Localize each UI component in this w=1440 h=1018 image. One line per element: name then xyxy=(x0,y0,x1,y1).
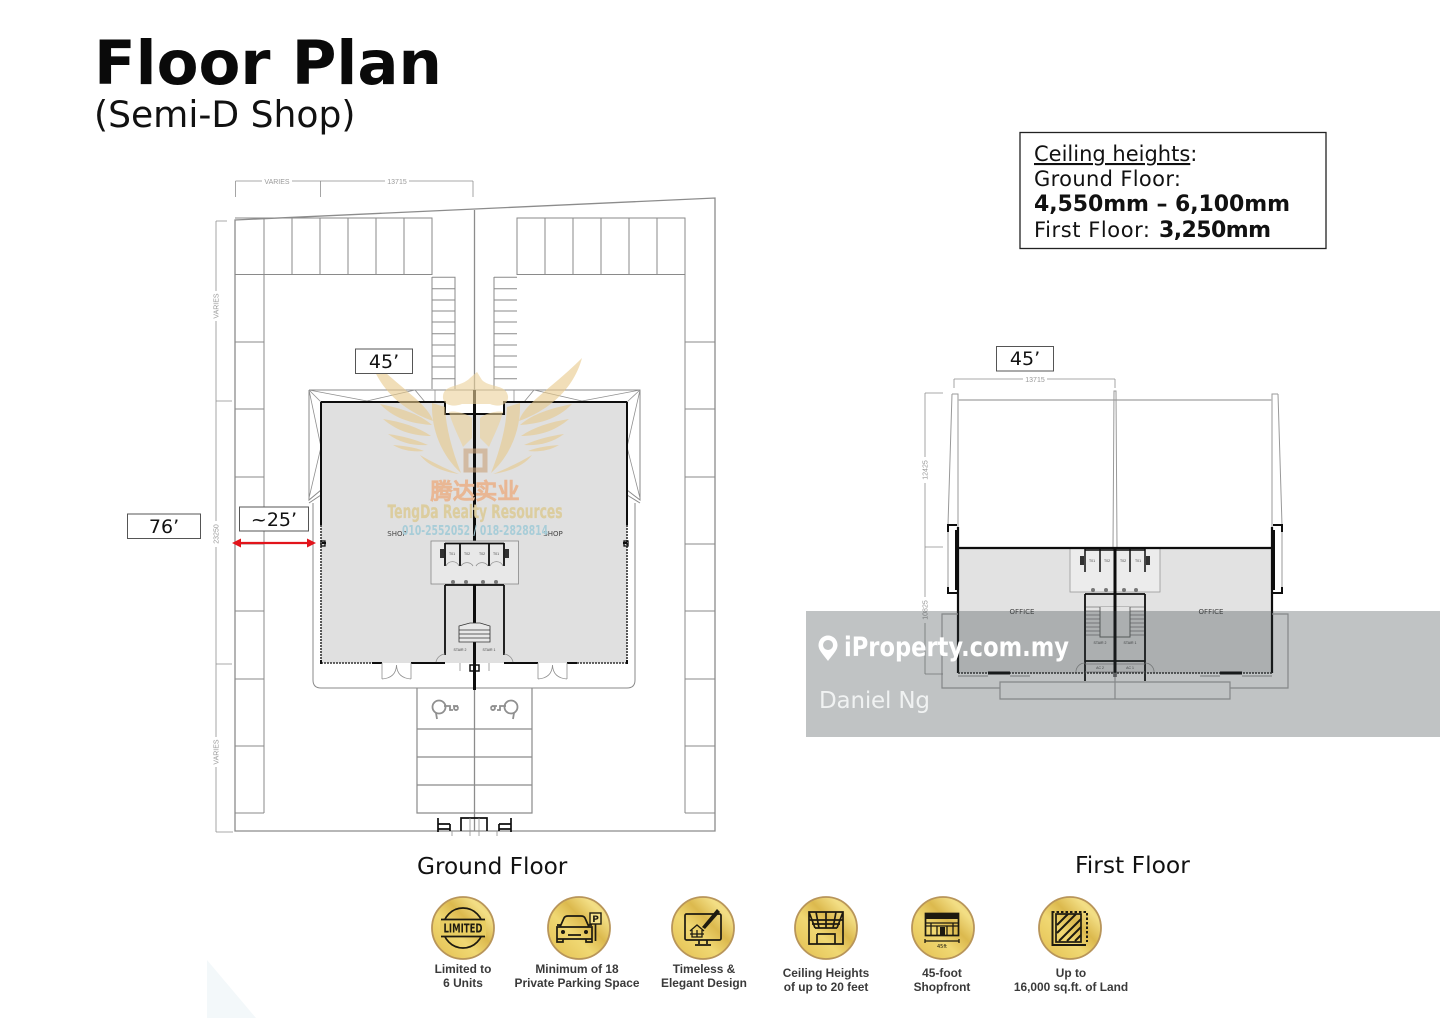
feature: ceiling heights xyxy=(783,897,870,994)
top dimension: VARIES xyxy=(264,179,290,186)
watermark: company name: 010-2552052 / 018-2828814 xyxy=(402,524,548,539)
balcony outline xyxy=(942,614,1288,699)
icon: location pin xyxy=(818,636,838,661)
brand name: iProperty.com.my xyxy=(844,632,1069,663)
stair core xyxy=(1076,594,1154,681)
label: 6 Units xyxy=(443,976,483,990)
stair core: AC 1 xyxy=(1126,666,1134,670)
stair core xyxy=(436,585,513,662)
external walls xyxy=(321,402,627,525)
motorcycle bays xyxy=(432,277,517,389)
toilets block: T01 xyxy=(449,552,455,556)
watermark: company name xyxy=(388,479,562,539)
toilets block: T01 xyxy=(1135,559,1141,563)
icon: shopfront: 45ft xyxy=(937,944,947,950)
accessible parking symbols xyxy=(432,700,518,719)
stair core: STAIR 2 xyxy=(1094,641,1107,645)
top parking bays left xyxy=(235,218,432,813)
front parking xyxy=(417,688,532,813)
logo right wing xyxy=(491,358,582,474)
first floor plan xyxy=(920,374,1288,699)
callout: ceiling heights: First Floor: xyxy=(1034,218,1150,242)
label: of up to 20 feet xyxy=(784,980,868,994)
toilets block: T02 xyxy=(479,552,485,556)
callout: ceiling heights xyxy=(1020,132,1326,248)
toilets block: T01 xyxy=(1089,559,1095,563)
label: 16,000 sq.ft. of Land xyxy=(1014,980,1128,994)
top dimension: 13715 xyxy=(1025,377,1045,384)
agent name: Daniel Ng xyxy=(819,688,930,714)
left dimension xyxy=(211,221,233,832)
icon: high ceiling xyxy=(809,912,843,944)
logo left wing xyxy=(370,358,461,474)
left dimension xyxy=(920,393,943,674)
left dimension: VARIES xyxy=(214,293,220,319)
callout: ceiling heights: Ground Floor: xyxy=(1034,167,1181,191)
label: 45 ft ground floor xyxy=(356,349,412,374)
toilets block: T02 xyxy=(1120,559,1126,563)
label: Limited to xyxy=(435,962,491,976)
toilets block: T01 xyxy=(493,552,499,556)
top dimension: 13715 xyxy=(387,179,407,186)
room labels xyxy=(1010,608,1223,616)
ground floor site plan xyxy=(211,176,715,836)
label: Up to xyxy=(1056,966,1086,980)
left dimension: VARIES xyxy=(214,739,220,765)
title: Floor Plan xyxy=(94,28,442,99)
watermark: TengDa logo xyxy=(370,358,582,474)
canopy and roof outline xyxy=(309,390,640,688)
feature: design xyxy=(661,897,747,990)
caption: first floor: First Floor xyxy=(1075,851,1190,879)
label: 45 ft ground floor: 45’ xyxy=(369,351,399,373)
left dimension: 23250 xyxy=(214,524,220,544)
toilets block: T02 xyxy=(464,552,470,556)
logo lion head xyxy=(443,372,508,447)
stair core: STAIR 2 xyxy=(454,648,467,652)
label: 25 ft setback xyxy=(240,507,308,531)
entrance gate xyxy=(438,818,511,836)
icon: land plot xyxy=(1052,911,1087,945)
label: 45 ft first floor xyxy=(996,346,1054,371)
feature: shopfront xyxy=(912,897,974,994)
label: Elegant Design xyxy=(661,976,747,990)
top parking bays right xyxy=(517,218,685,813)
watermark: company name: TengDa Realty Resources xyxy=(388,501,562,523)
label: 76 ft xyxy=(128,514,200,538)
top dimension xyxy=(954,374,1115,388)
toilets block xyxy=(1070,548,1160,592)
room labels: OFFICE xyxy=(1010,608,1034,616)
toilets block xyxy=(431,541,518,584)
subtitle: (Semi-D Shop) xyxy=(94,94,355,136)
label: 76 ft: 76’ xyxy=(149,516,179,538)
label: Shopfront xyxy=(914,980,970,994)
label: 25 ft setback: ~25’ xyxy=(251,509,297,531)
side parking bays xyxy=(235,342,715,813)
stair core: STAIR 1 xyxy=(1124,641,1137,645)
room labels xyxy=(387,530,563,538)
roof lines xyxy=(309,390,640,498)
room labels: SHOP xyxy=(543,530,563,538)
left dimension: 12425 xyxy=(922,460,930,480)
room labels: OFFICE xyxy=(1199,608,1223,616)
label: 45 ft first floor: 45’ xyxy=(1010,348,1040,370)
top dimension xyxy=(236,176,473,197)
label: 45-foot xyxy=(922,966,962,980)
building floor area xyxy=(321,402,627,663)
feature: parking xyxy=(515,897,640,990)
label: Minimum of 18 xyxy=(535,962,619,976)
stair core: AC 2 xyxy=(1096,666,1104,670)
icon: car and parking sign: P xyxy=(592,915,599,925)
feature: limited units xyxy=(432,897,494,990)
label: Timeless & xyxy=(673,962,735,976)
label: Ceiling Heights xyxy=(783,966,869,980)
roof outline xyxy=(948,394,1282,527)
label: Private Parking Space xyxy=(515,976,640,990)
callout: ceiling heights: 4,550mm – 6,100mm xyxy=(1034,192,1290,217)
site boundary xyxy=(235,198,715,831)
room labels: SHOP xyxy=(387,530,407,538)
icon: limited stamp: LIMITED xyxy=(444,922,483,936)
first floor area xyxy=(958,548,1272,673)
callout: ceiling heights: 3,250mm xyxy=(1159,218,1271,243)
entrance doors xyxy=(382,663,567,679)
central party line xyxy=(1113,391,1117,548)
watermark: company name: 腾达实业 xyxy=(430,479,520,505)
icon: monitor with drawing xyxy=(685,909,721,945)
walls xyxy=(958,527,1272,673)
callout: ceiling heights: Ceiling heights: xyxy=(1034,142,1197,166)
party wall xyxy=(473,390,476,690)
logo letter D xyxy=(466,451,485,470)
left dimension: 10825 xyxy=(922,600,930,620)
side bays xyxy=(948,525,1282,593)
stair core: STAIR 1 xyxy=(483,648,496,652)
watermark band: iProperty xyxy=(806,611,1440,737)
arrow: setback xyxy=(232,538,316,548)
decorative corner shape xyxy=(207,960,256,1018)
feature: land size xyxy=(1014,897,1128,994)
toilets block: T02 xyxy=(1104,559,1110,563)
caption: ground floor: Ground Floor xyxy=(417,853,568,880)
